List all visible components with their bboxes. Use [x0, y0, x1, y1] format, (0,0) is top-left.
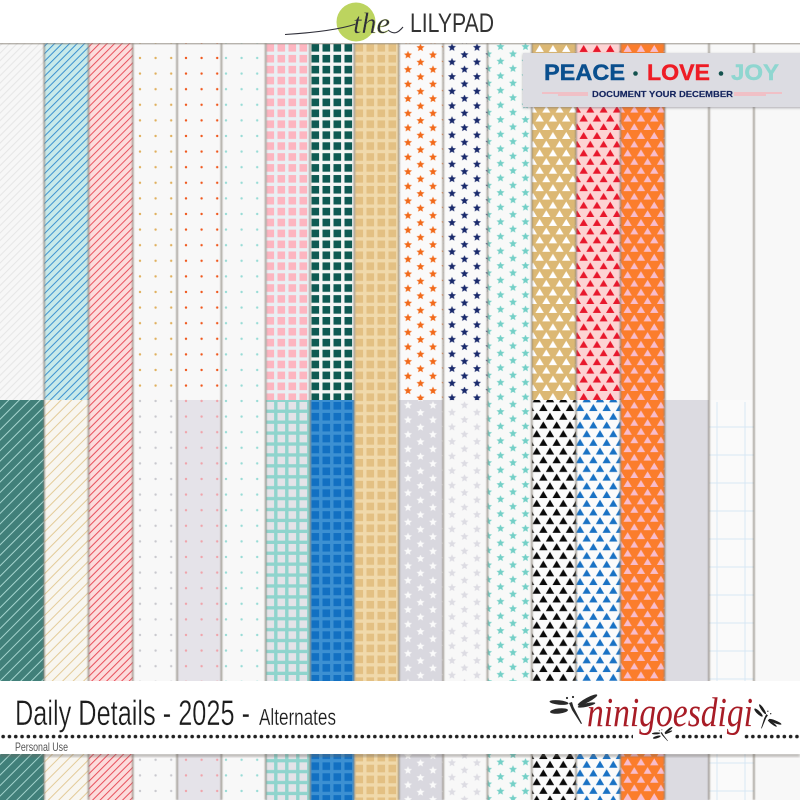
banner dot [719, 71, 723, 76]
panel: paper strips, top row [0, 43, 800, 400]
panel: Peace Love Joy banner [523, 53, 800, 108]
banner tagline: DOCUMENT YOUR DECEMBER [592, 90, 733, 99]
icon: small dragonfly right [748, 701, 783, 736]
panel: title band [0, 681, 800, 756]
banner dot [633, 71, 638, 76]
title: Daily Details - 2025 - [15, 694, 250, 733]
logo text: ninigoesdigi: ninigoesdigi [587, 689, 753, 735]
icon: large dragonfly [549, 693, 598, 724]
banner rule right [734, 92, 782, 96]
logo: the Lilypad [285, 2, 494, 42]
logo word: LILYPAD: LILYPAD [410, 8, 494, 38]
subtitle: Alternates [259, 704, 336, 730]
banner rule left [542, 92, 588, 96]
personal use label: Personal Use [15, 740, 68, 754]
panel: paper strips, bottom row [0, 400, 800, 800]
icon: small dragonfly centre [651, 726, 675, 744]
dotted rule [0, 733, 800, 740]
logo word: the: the [353, 7, 390, 40]
banner word: JOY: JOY [731, 60, 779, 85]
banner word: PEACE: PEACE [544, 60, 625, 85]
logo swoosh [285, 24, 403, 34]
banner word: LOVE: LOVE [647, 60, 710, 85]
icon: green lily pad circle [336, 2, 376, 42]
top white header band [0, 0, 800, 43]
